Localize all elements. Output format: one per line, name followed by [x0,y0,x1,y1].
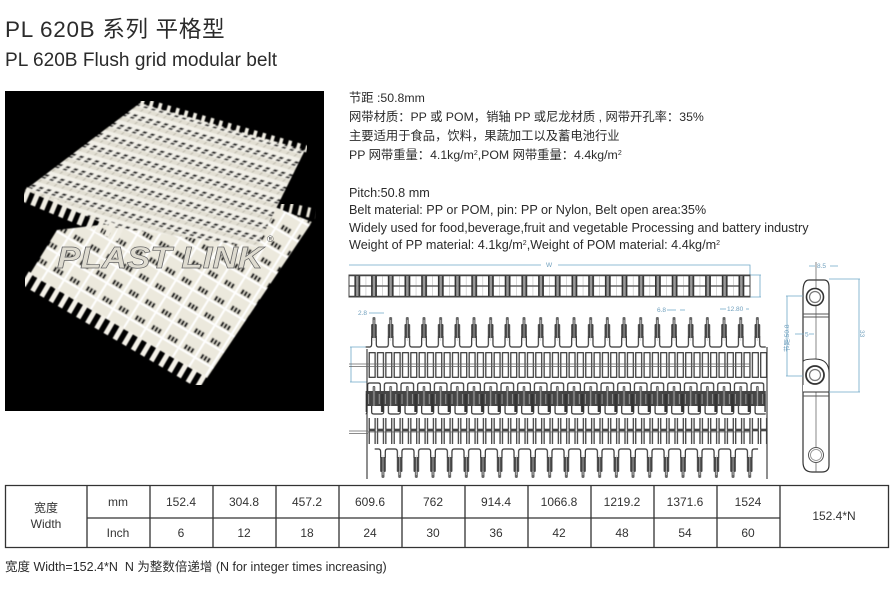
row header: Width [31,517,61,531]
technical drawing: side view: 8.5 [817,263,826,270]
specification text: English: Weight of PP material: 4.1kg/m [349,238,523,252]
specification text: Chinese: 节距 :50.8mm [349,91,425,105]
row: mm: 304.8 [229,495,259,509]
specification text: Chinese: 2 [474,150,478,157]
upper teeth row [366,317,766,348]
technical drawing: belt plan view [349,306,767,479]
row: mm [108,495,762,509]
lower slotted band [368,418,767,444]
specification text: English: Pitch:50.8 mm [349,186,430,200]
row: inch: 12 [237,526,251,540]
row: mm: 457.2 [292,495,322,509]
technical drawing: belt top strip [349,262,761,297]
footnote: 宽度 Width=152.4*N N 为整数倍递增 (N for integer times increasing) [5,559,387,574]
row: inch: 30 [426,526,440,540]
upper slotted band [368,352,767,378]
specification text: English: 2 [716,240,720,247]
specification text: Chinese: 主要适用于食品，饮料，果蔬加工以及蓄电池行业 [349,128,620,143]
row: inch: 42 [552,526,566,540]
row: mm: 152.4 [166,495,196,509]
row: mm: 914.4 [481,495,511,509]
row: mm: 609.6 [355,495,385,509]
specification text: Chinese: 网带材质：PP 或 POM，销轴 PP 或尼龙材质 , 网带开孔率：35% [349,109,704,124]
title: Chinese: PL 620B 系列 平格型 [5,17,225,42]
title: English: PL 620B Flush grid modular belt [5,50,278,71]
row: mm: 1524 [735,495,762,509]
dimension labels: 12.80 [727,306,744,313]
row: inch: 54 [678,526,692,540]
dimension labels: 6.8 [657,307,666,314]
upper belt [24,101,307,247]
row header [31,500,61,531]
formula cell: 152.4*N [812,509,856,523]
lower teeth row [375,448,758,479]
row: mm: 1066.8 [541,495,578,509]
specification text: English: Widely used for food,beverage,fruit and vegetable Processing and battery industry [349,221,809,235]
product photo panel [5,91,324,411]
technical drawing: side view: 5 [805,332,809,338]
specification text: Chinese [349,91,704,162]
row: mm: 1219.2 [604,495,641,509]
specification text: English [349,186,809,252]
dimension labels [350,306,749,382]
row: inch: 18 [300,526,314,540]
specification text: English: 2 [523,240,527,247]
technical drawing: side view [783,262,865,472]
row: inch: 60 [741,526,755,540]
technical drawing: belt top strip: W [546,262,553,269]
watermark: PLAST LINK: PLAST LINK [57,240,266,275]
specification text: English: Belt material: PP or POM, pin: PP or Nylon, Belt open area:35% [349,203,706,217]
central interlocked band [366,382,766,415]
specification text: Chinese: PP 网带重量：4.1kg/m [349,148,474,162]
row: mm: 762 [423,495,443,509]
row: inch [107,526,755,540]
row: mm: 1371.6 [667,495,704,509]
row: inch: 48 [615,526,629,540]
row: inch: 36 [489,526,503,540]
row: inch: 6 [178,526,185,540]
specification text: Chinese: ,POM 网带重量：4.4kg/m [478,148,618,162]
lower belt [25,204,316,385]
dimension labels: 2.8 [358,310,367,317]
specification text: Chinese: 2 [618,150,622,157]
watermark: registered mark: ® [267,234,274,244]
technical drawing: side view: 节距:50.8 [783,324,791,352]
specification text: English: ,Weight of POM material: 4.4kg/m [527,238,716,252]
row header: 宽度 [34,500,58,515]
row: inch: 24 [363,526,377,540]
row: mm: mm [108,495,128,509]
technical drawing: side view: 33 [858,330,865,338]
width table [6,485,888,548]
row: inch: Inch [107,526,129,540]
